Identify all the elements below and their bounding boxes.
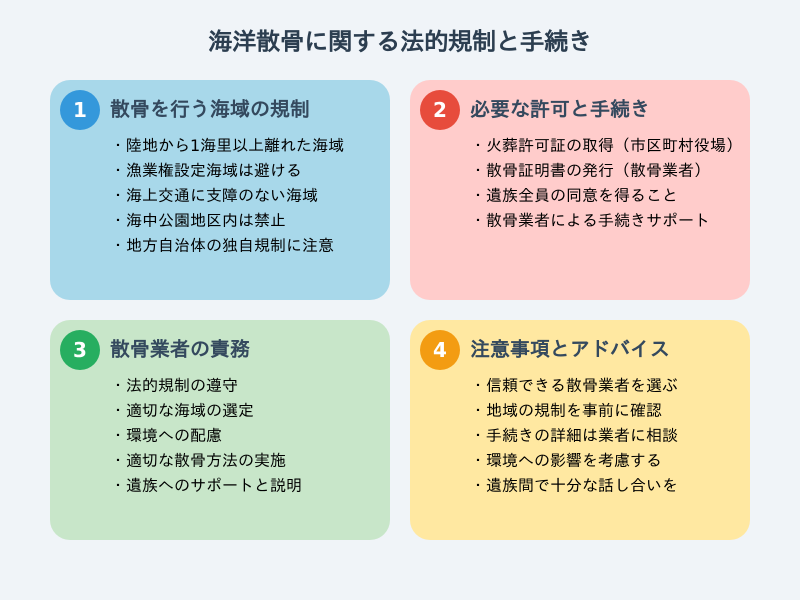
heading: notes and advice: 注意事項とアドバイス (470, 337, 670, 361)
list: sea area regulations: ・地方自治体の独自規制に注意 (110, 236, 334, 255)
title: 海洋散骨に関する法的規制と手続き (208, 27, 592, 56)
list: operator responsibilities: ・法的規制の遵守 (110, 376, 238, 395)
list: notes and advice: ・環境への影響を考慮する (470, 451, 662, 470)
heading: sea area regulations: 散骨を行う海域の規制 (110, 97, 310, 121)
list: permits and procedures: ・散骨業者による手続きサポート (470, 211, 710, 230)
list: operator responsibilities: ・適切な散骨方法の実施 (110, 451, 286, 470)
panel: operator responsibilities (50, 320, 390, 540)
list: notes and advice: ・地域の規制を事前に確認 (470, 401, 662, 420)
list: operator responsibilities: ・適切な海域の選定 (110, 401, 254, 420)
list: operator responsibilities: ・遺族へのサポートと説明 (110, 476, 302, 495)
icon: number 3 badge (60, 330, 100, 370)
icon: number 1 badge: 1 (73, 98, 87, 122)
icon: number 2 badge: 2 (433, 98, 447, 122)
list: sea area regulations: ・海上交通に支障のない海域 (110, 186, 318, 205)
list: operator responsibilities: ・環境への配慮 (110, 426, 222, 445)
list: sea area regulations (110, 136, 344, 255)
icon: number 3 badge: 3 (73, 338, 87, 362)
panel: permits and procedures (410, 80, 750, 300)
heading: permits and procedures: 必要な許可と手続き (470, 97, 650, 121)
list: sea area regulations: ・陸地から1海里以上離れた海域 (110, 136, 344, 155)
heading: operator responsibilities: 散骨業者の責務 (110, 337, 250, 361)
list: notes and advice: ・遺族間で十分な話し合いを (470, 476, 678, 495)
list: notes and advice: ・信頼できる散骨業者を選ぶ (470, 376, 678, 395)
list: permits and procedures: ・遺族全員の同意を得ること (470, 186, 678, 205)
list: operator responsibilities (110, 376, 302, 495)
icon: number 1 badge (60, 90, 100, 130)
list: permits and procedures: ・火葬許可証の取得（市区町村役場） (470, 136, 742, 155)
list: sea area regulations: ・漁業権設定海域は避ける (110, 161, 302, 180)
list: sea area regulations: ・海中公園地区内は禁止 (110, 211, 286, 230)
list: notes and advice: ・手続きの詳細は業者に相談 (470, 426, 678, 445)
panel: notes and advice (410, 320, 750, 540)
icon: number 4 badge (420, 330, 460, 370)
panel: sea area regulations (50, 80, 390, 300)
icon: number 2 badge (420, 90, 460, 130)
list: notes and advice (470, 376, 678, 495)
list: permits and procedures: ・散骨証明書の発行（散骨業者） (470, 161, 710, 180)
icon: number 4 badge: 4 (433, 338, 447, 362)
list: permits and procedures (470, 136, 742, 230)
